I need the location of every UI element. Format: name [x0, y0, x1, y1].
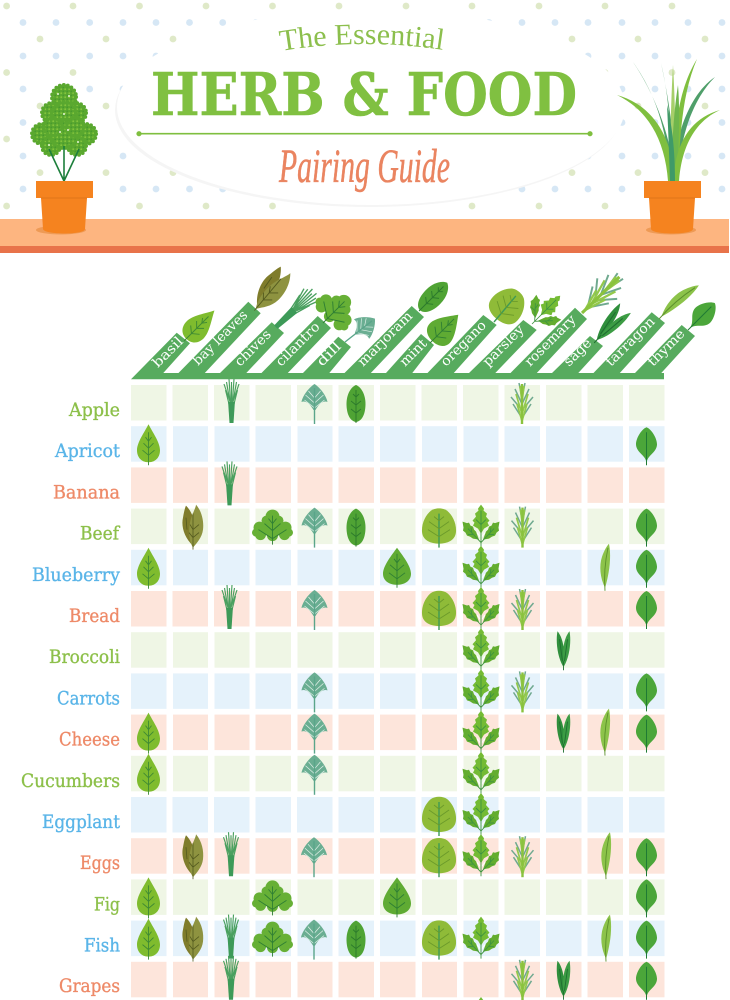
icon: rosemary	[512, 960, 534, 1000]
white title ellipse	[115, 9, 625, 207]
row: Carrots	[57, 669, 665, 712]
label: Cucumbers: Cucumbers	[21, 771, 120, 792]
banner label: tarragon: tarragon	[603, 314, 659, 370]
icon: thyme	[636, 879, 657, 917]
icon: parsley	[462, 546, 500, 588]
banner label: rosemary: rosemary	[522, 312, 580, 370]
row: Broccoli	[49, 628, 665, 670]
icon: parsley	[462, 587, 500, 629]
icon: cilantro	[252, 880, 293, 915]
icon: parsley	[462, 628, 500, 670]
row: Fish	[84, 915, 665, 962]
label: Eggs: Eggs	[80, 853, 120, 874]
icon: dill	[301, 837, 327, 877]
herb banner	[131, 263, 722, 379]
icon: thyme	[636, 509, 657, 547]
icon: dill	[302, 672, 328, 712]
banner icon: basil	[175, 302, 223, 350]
banner label: parsley: parsley	[480, 321, 528, 370]
icon: basil	[137, 754, 160, 795]
row: Cheese	[59, 709, 665, 756]
icon: thyme	[636, 715, 657, 753]
shelf	[0, 219, 729, 253]
icon: rosemary	[511, 383, 533, 424]
icon: parsley	[462, 752, 500, 794]
icon: tarragon	[600, 709, 610, 756]
banner icon: cilantro	[308, 282, 364, 338]
icon: marjoram	[346, 921, 366, 959]
icon: sage	[557, 631, 570, 670]
icon: parsley	[462, 793, 500, 835]
icon: thyme	[636, 962, 657, 1000]
row: Fig	[94, 877, 665, 918]
icon: parsley	[462, 834, 500, 876]
label: Grapes: Grapes	[59, 976, 120, 997]
icon: thyme	[636, 591, 657, 629]
icon: chives	[224, 379, 239, 423]
banner icon: parsley	[520, 283, 573, 336]
row: Eggplant	[42, 793, 665, 836]
row: Eggs	[80, 832, 665, 879]
banner label: basil: basil	[149, 334, 187, 371]
icon: thyme	[636, 550, 657, 588]
icon: dill	[302, 714, 328, 754]
icon: sage	[557, 714, 570, 753]
row: Apple	[68, 379, 665, 424]
banner label: mint: mint	[397, 335, 431, 370]
icon: bay leaves	[182, 917, 203, 962]
icon: parsley tip of next row	[462, 997, 500, 1000]
title: Pairing Guide: Pairing Guide	[278, 140, 450, 193]
banner label: sage: sage	[561, 335, 595, 370]
icon: bay leaves	[182, 505, 203, 550]
banner icon: tarragon	[656, 279, 700, 323]
icon: tarragon	[600, 544, 610, 591]
icon: chives	[224, 832, 238, 876]
banner label: chives: chives	[232, 327, 275, 370]
icon: marjoram	[346, 385, 366, 423]
icon: rosemary	[512, 507, 534, 548]
icon: marjoram	[346, 509, 366, 547]
icon: parsley	[462, 669, 500, 711]
row: Bread	[69, 585, 665, 630]
icon: basil	[137, 424, 160, 465]
plant: chives in pot	[617, 59, 720, 234]
plant: curly parsley in pot	[32, 85, 96, 234]
row: Banana	[53, 461, 665, 505]
label: Apricot: Apricot	[54, 441, 121, 462]
icon: sage	[557, 961, 570, 1000]
icon: parsley	[462, 505, 500, 547]
banner icon: bay leaves	[245, 263, 297, 318]
header polka dots	[3, 3, 725, 209]
banner icon: oregano	[481, 281, 532, 333]
icon: tarragon	[601, 832, 611, 879]
icon: bay leaves	[182, 834, 203, 879]
icon: basil	[137, 877, 160, 918]
banner icon: sage	[588, 303, 632, 348]
banner label: marjoram: marjoram	[355, 308, 416, 370]
icon: basil	[137, 919, 160, 960]
row: Cucumbers	[21, 752, 665, 795]
banner icon: mint	[420, 305, 468, 353]
icon: mint	[383, 548, 411, 588]
banner label: cilantro: cilantro	[273, 319, 323, 370]
icon: chives	[224, 915, 238, 959]
icon: basil	[137, 548, 160, 589]
icon: thyme	[636, 838, 657, 876]
label: Broccoli: Broccoli	[49, 647, 120, 668]
icon: dill	[302, 384, 328, 424]
label: Banana: Banana	[53, 482, 120, 503]
title: HERB & FOOD: HERB & FOOD	[151, 60, 577, 129]
banner icon: dill	[337, 309, 383, 352]
label: Fig: Fig	[94, 894, 120, 915]
icon: rosemary	[512, 589, 534, 630]
icon: mint	[383, 877, 411, 917]
banner label: bay leaves: bay leaves	[190, 307, 251, 369]
row: Blueberry	[32, 544, 665, 591]
banner label: dill: dill	[314, 339, 345, 370]
label: Eggplant: Eggplant	[42, 812, 121, 833]
icon: dill	[302, 508, 328, 548]
icon: chives	[224, 956, 238, 1000]
icon: dill	[302, 590, 328, 630]
row: Beef	[80, 505, 665, 550]
label: Cheese: Cheese	[59, 730, 120, 751]
title: The Essential: The Essential	[278, 24, 443, 50]
banner icon: chives	[270, 285, 321, 334]
banner icon: thyme	[681, 296, 722, 337]
icon: dill	[301, 920, 327, 960]
icon: thyme	[636, 427, 657, 465]
banner icon: marjoram	[412, 276, 454, 318]
row: Apricot	[54, 424, 665, 465]
row: Grapes	[59, 956, 665, 1000]
icon: oregano	[422, 591, 456, 630]
icon: rosemary	[512, 671, 534, 712]
icon: parsley	[462, 917, 500, 959]
label: Bread: Bread	[69, 606, 120, 627]
icon: tarragon	[601, 915, 611, 962]
icon: rosemary	[512, 836, 534, 877]
label: Apple: Apple	[68, 400, 120, 421]
icon: cilantro	[252, 510, 293, 545]
banner icon: rosemary	[572, 266, 630, 323]
banner label: thyme: thyme	[645, 326, 688, 370]
icon: parsley	[462, 711, 500, 753]
icon: oregano	[422, 920, 456, 960]
title rule	[136, 131, 593, 136]
label: Beef: Beef	[80, 524, 120, 545]
icon: thyme	[636, 921, 657, 959]
icon: oregano	[422, 508, 456, 548]
label: Carrots: Carrots	[57, 688, 120, 709]
icon: cilantro	[252, 922, 293, 957]
icon: thyme	[636, 673, 657, 711]
banner label: oregano: oregano	[438, 318, 490, 370]
icon: chives	[222, 461, 237, 505]
icon: oregano	[422, 797, 456, 836]
label: Blueberry: Blueberry	[32, 565, 121, 586]
icon: basil	[137, 713, 160, 754]
icon: chives	[222, 585, 237, 629]
icon: oregano	[422, 838, 456, 877]
banner bands	[131, 302, 695, 379]
label: Fish: Fish	[84, 936, 120, 957]
icon: dill	[302, 755, 328, 795]
